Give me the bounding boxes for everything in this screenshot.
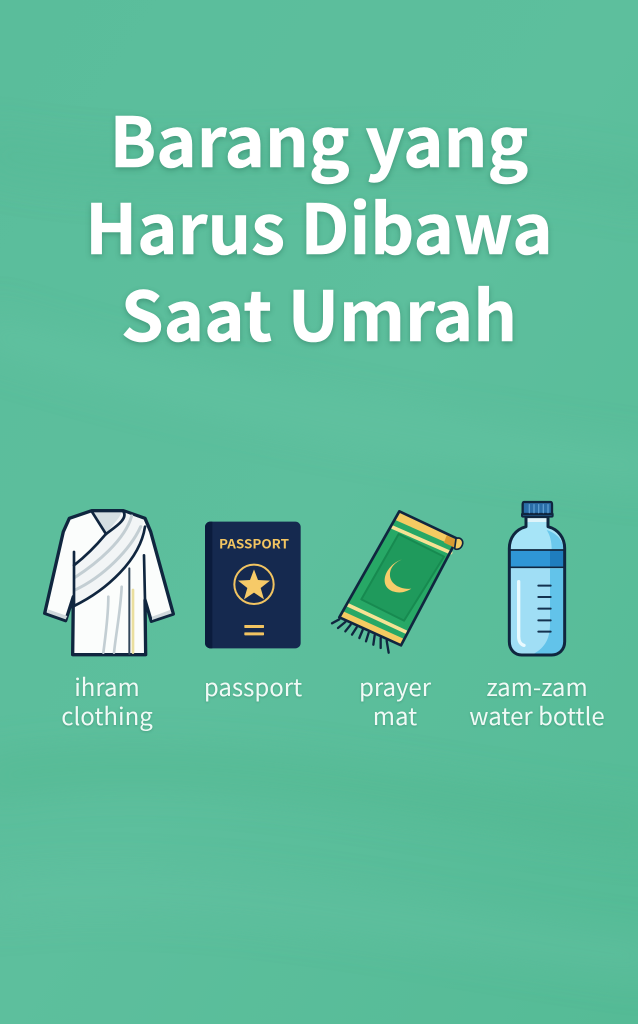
icon: passport: PASSPORT [219, 534, 289, 553]
label: zam-zam water bottle [469, 668, 605, 732]
icon: prayer mat [330, 510, 464, 654]
label: prayer mat: mat [373, 697, 417, 732]
label: ihram clothing: clothing [61, 697, 153, 732]
label: passport: passport [204, 668, 302, 703]
title: Barang yang [110, 88, 528, 187]
icon: ihram clothing [43, 509, 175, 656]
label: ihram clothing [61, 668, 153, 732]
title: Harus Dibawa [85, 175, 553, 274]
label: ihram clothing: ihram [74, 668, 140, 703]
label: prayer mat [359, 668, 432, 732]
title [85, 88, 553, 361]
label: zam-zam water bottle: zam-zam [486, 668, 588, 703]
icon: water bottle [508, 500, 566, 656]
icon: passport [205, 522, 301, 648]
label: prayer mat: prayer [359, 668, 431, 703]
label: zam-zam water bottle: water bottle [469, 697, 605, 732]
title: Saat Umrah [121, 262, 517, 361]
